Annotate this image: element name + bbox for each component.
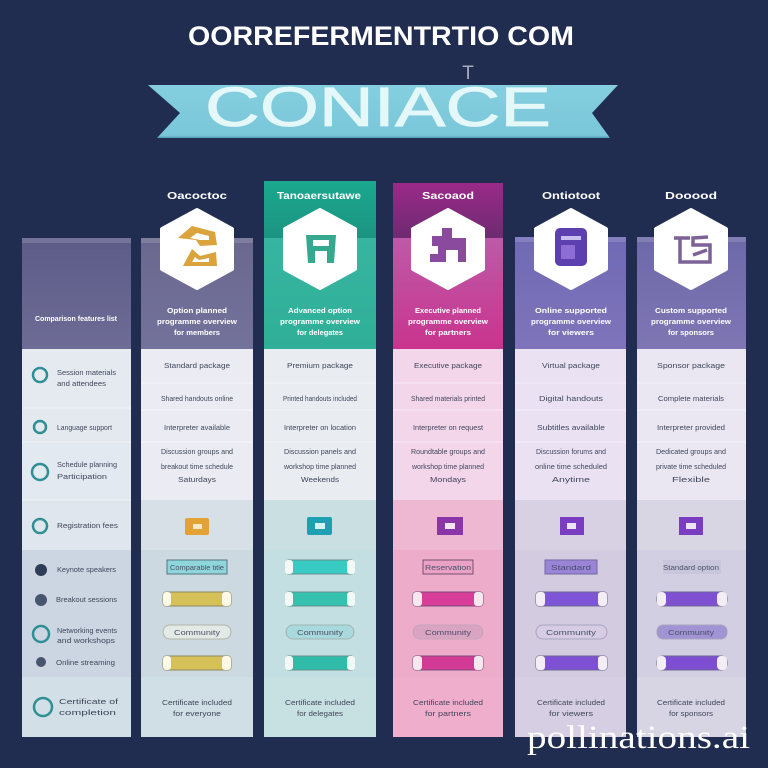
- panel: option column 1 (gold): programme overview: [157, 317, 237, 326]
- panel: option column 4 (violet): Anytime: [552, 475, 590, 484]
- panel: option column 4 (violet): Ontiotoot: [542, 191, 601, 202]
- panel: option column 3 (magenta): Mondays: [430, 475, 466, 484]
- panel: option column 3 (magenta): Interpreter on request: [413, 423, 484, 432]
- panel: option column 3 (magenta): [393, 183, 503, 737]
- icon: violet ticket: [679, 517, 703, 535]
- panel: option column 4 (violet): Digital handouts: [539, 394, 603, 403]
- panel: option column 4 (violet): [515, 191, 626, 737]
- panel: feature labels column: Language support: [57, 423, 113, 432]
- pill: violet with text: [545, 560, 597, 574]
- panel: feature labels column: Online streaming: [56, 658, 115, 667]
- panel: option column 5 (lavender): Complete materials: [658, 394, 724, 403]
- panel: option column 3 (magenta): Roundtable groups and: [411, 447, 485, 456]
- panel: option column 3 (magenta): for partners: [425, 328, 471, 337]
- panel: option column 4 (violet): online time scheduled: [535, 462, 607, 471]
- panel: option column 4 (violet): for viewers: [549, 709, 593, 718]
- panel: option column 5 (lavender): Flexible: [672, 475, 710, 484]
- panel: option column 2 (teal): Certificate included: [285, 698, 355, 707]
- panel: option column 1 (gold): for members: [174, 328, 220, 337]
- panel: option column 5 (lavender): Dedicated groups and: [656, 447, 726, 456]
- panel: option column 2 (teal): Printed handouts included: [283, 394, 357, 403]
- panel: option column 2 (teal): Advanced option: [288, 306, 352, 315]
- pill: violet: [657, 656, 727, 670]
- pill: teal: [286, 656, 354, 670]
- panel: option column 4 (violet): programme overview: [531, 317, 611, 326]
- panel: option column 5 (lavender): Dooood: [665, 191, 717, 202]
- panel: option column 2 (teal): for delegates: [297, 328, 343, 337]
- pill: gold: [163, 656, 231, 670]
- panel: option column 1 (gold): Oacoctoc: [167, 191, 228, 202]
- panel: option column 2 (teal): [264, 181, 376, 737]
- panel: option column 4 (violet): Community: [546, 630, 597, 637]
- panel: option column 3 (magenta): workshop time planned: [411, 462, 484, 471]
- panel: feature labels column: Certificate of: [59, 697, 119, 706]
- panel: option column 5 (lavender): Community: [668, 630, 715, 637]
- panel: option column 2 (teal): Tanoaersutawe: [277, 191, 362, 202]
- panel: option column 4 (violet): Standard: [551, 565, 591, 572]
- panel: option column 3 (magenta): programme overview: [408, 317, 488, 326]
- panel: option column 3 (magenta): Executive planned: [415, 306, 481, 315]
- pill: violet: [536, 656, 607, 670]
- pill: with text: [663, 560, 721, 574]
- panel: feature labels column: Breakout sessions: [56, 595, 117, 604]
- panel: option column 5 (lavender): Custom supported: [655, 306, 727, 315]
- panel: feature labels column: Registration fees: [57, 521, 118, 530]
- icon: violet document: [555, 228, 587, 266]
- watermark: pollinations.ai: [527, 720, 750, 756]
- panel: option column 5 (lavender): [637, 191, 746, 737]
- panel: option column 2 (teal): Weekends: [301, 475, 339, 484]
- panel: option column 1 (gold): [141, 191, 253, 737]
- panel: feature labels column: Keynote speakers: [57, 565, 116, 574]
- icon: purple ticket: [437, 517, 463, 535]
- panel: option column 1 (gold): Certificate included: [162, 698, 232, 707]
- icon: teal gate: [306, 235, 336, 263]
- icon: gold building: [178, 226, 217, 266]
- icon: outlined chart: [674, 237, 710, 262]
- panel: option column 5 (lavender): Sponsor package: [657, 361, 725, 370]
- panel: option column 5 (lavender): Standard option: [663, 565, 719, 572]
- ribbon banner: [148, 75, 618, 138]
- pill: pink: [413, 656, 483, 670]
- pill: light with text: [657, 625, 727, 639]
- panel: option column 3 (magenta): for partners: [425, 709, 471, 718]
- ribbon heading: CONIACE: [205, 75, 551, 138]
- panel: option column 1 (gold): Discussion groups and: [161, 447, 233, 456]
- panel: option column 2 (teal): programme overview: [280, 317, 360, 326]
- panel: feature labels column: Comparison features list: [35, 314, 117, 323]
- panel: option column 2 (teal): workshop time planned: [283, 462, 356, 471]
- pill: gold: [163, 592, 231, 606]
- icon: teal ticket: [307, 517, 332, 535]
- pill: teal: [286, 592, 354, 606]
- pill: pink: [413, 592, 483, 606]
- panel: option column 1 (gold): Community: [174, 630, 221, 637]
- panel: option column 1 (gold): Saturdays: [178, 475, 216, 484]
- pill: light with text: [286, 625, 354, 639]
- panel: option column 5 (lavender): Certificate included: [657, 698, 725, 707]
- panel: option column 4 (violet): Virtual package: [542, 361, 600, 370]
- panel: feature labels column: and workshops: [57, 636, 115, 645]
- panel: feature labels column: Participation: [57, 472, 107, 481]
- panel: option column 1 (gold): Interpreter available: [164, 423, 230, 432]
- icon: violet ticket: [560, 517, 584, 535]
- panel: option column 1 (gold): Comparable title: [170, 565, 224, 572]
- pill: teal: [286, 560, 354, 574]
- icon: purple figures: [430, 228, 466, 262]
- panel: option column 2 (teal): Premium package: [287, 361, 353, 370]
- panel: feature labels column: completion: [59, 708, 116, 717]
- panel: option column 2 (teal): for delegates: [297, 709, 343, 718]
- panel: option column 2 (teal): Community: [297, 630, 344, 637]
- panel: option column 3 (magenta): Certificate included: [413, 698, 483, 707]
- pill: violet: [657, 592, 727, 606]
- panel: feature labels column: Networking events: [57, 626, 117, 635]
- panel: feature labels column: Session materials: [57, 368, 116, 377]
- panel: option column 3 (magenta): Reservation: [425, 565, 471, 572]
- panel: option column 4 (violet): for viewers: [548, 328, 594, 337]
- title: OORREFERMENTRTIO COM: [188, 21, 574, 51]
- panel: feature labels column: and attendees: [57, 379, 106, 388]
- panel: option column 3 (magenta): Executive package: [414, 361, 482, 370]
- panel: option column 1 (gold): Option planned: [167, 306, 227, 315]
- pill: violet: [536, 592, 607, 606]
- pill: with text: [167, 560, 227, 574]
- panel: option column 5 (lavender): for sponsors: [669, 709, 713, 718]
- panel: option column 1 (gold): breakout time schedule: [161, 462, 233, 471]
- panel: option column 4 (violet): Online supported: [535, 306, 607, 315]
- panel: option column 3 (magenta): Sacoaod: [422, 191, 474, 202]
- panel: option column 4 (violet): Subtitles available: [537, 423, 605, 432]
- panel: option column 2 (teal): Interpreter on location: [284, 423, 356, 432]
- panel: option column 2 (teal): Discussion panels and: [284, 447, 356, 456]
- pill: light with text: [413, 625, 483, 639]
- small mark above ribbon: T: [462, 63, 474, 84]
- panel: feature labels column: Schedule planning: [57, 460, 117, 469]
- panel: feature labels column: [22, 238, 131, 737]
- panel: option column 5 (lavender): programme overview: [651, 317, 731, 326]
- icon: gold ticket: [185, 518, 209, 535]
- panel: option column 5 (lavender): private time scheduled: [656, 462, 726, 471]
- pill: light with text: [536, 625, 607, 639]
- panel: option column 3 (magenta): Community: [425, 630, 472, 637]
- panel: option column 4 (violet): Certificate included: [537, 698, 605, 707]
- panel: option column 1 (gold): Standard package: [164, 361, 230, 370]
- panel: option column 3 (magenta): Shared materials printed: [411, 394, 485, 403]
- panel: option column 1 (gold): for everyone: [173, 709, 221, 718]
- panel: option column 4 (violet): Discussion forums and: [536, 447, 606, 456]
- pill: light with text: [163, 625, 231, 639]
- panel: option column 1 (gold): Shared handouts online: [161, 394, 233, 403]
- panel: option column 5 (lavender): Interpreter provided: [657, 423, 725, 432]
- panel: option column 5 (lavender): for sponsors: [668, 328, 714, 337]
- pill: with text: [423, 560, 473, 574]
